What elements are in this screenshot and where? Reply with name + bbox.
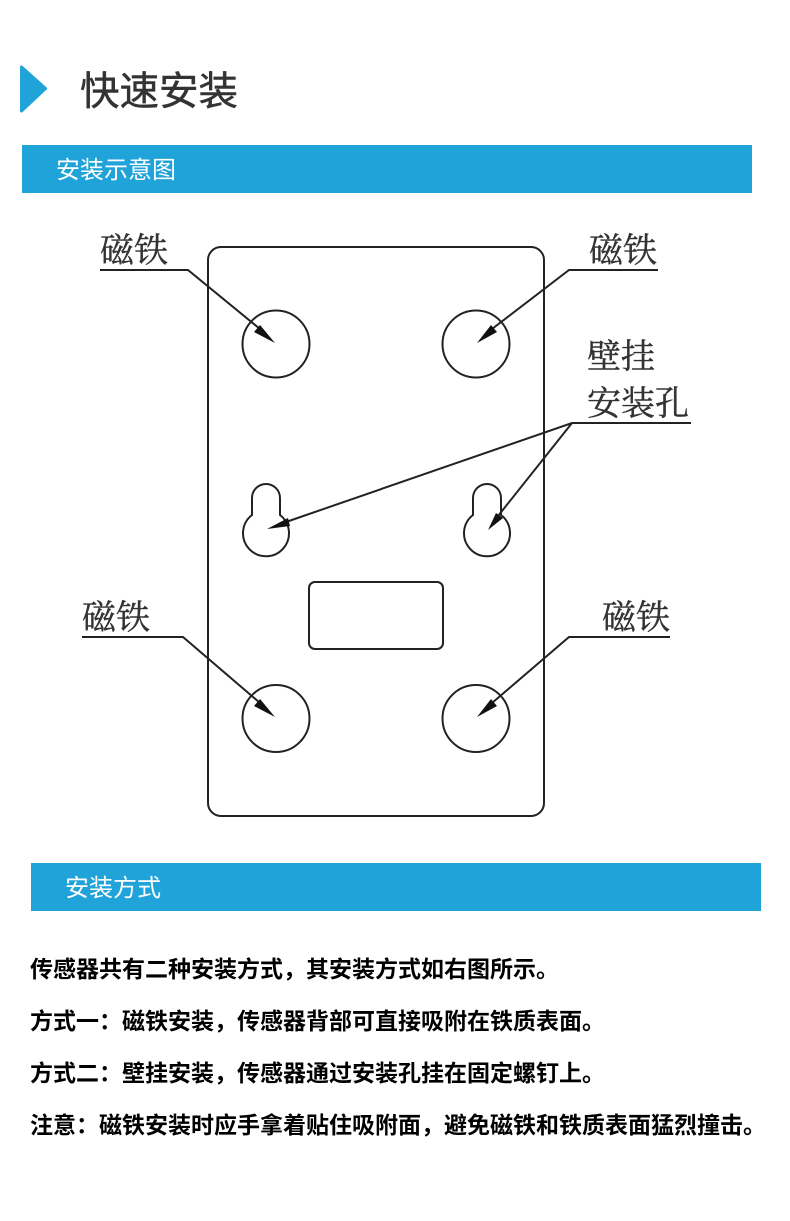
text: caution note: 注意：磁铁安装时应手拿着贴住吸附面，避免磁铁和铁质表面猛烈撞击。 [30, 1112, 766, 1138]
label: magnet top left [100, 232, 275, 343]
section band: installation methods: 安装方式 [65, 875, 161, 902]
text: method one: 方式一：磁铁安装，传感器背部可直接吸附在铁质表面。 [30, 1008, 605, 1034]
section band: installation diagram [22, 145, 752, 193]
label: magnet bottom left [82, 599, 275, 717]
label: magnet top left: 磁铁 [100, 232, 168, 270]
device back plate [208, 247, 544, 816]
label: wall-mount holes: 壁挂 [587, 338, 655, 376]
magnet circles [242, 310, 510, 752]
label: magnet top right: 磁铁 [589, 232, 657, 270]
text: method two: 方式二：壁挂安装，传感器通过安装孔挂在固定螺钉上。 [30, 1060, 605, 1086]
title: 快速安装 [80, 70, 238, 114]
text: intro: 传感器共有二种安装方式，其安装方式如右图所示。 [30, 956, 559, 982]
wall-mount keyholes [243, 484, 510, 556]
label: magnet bottom left: 磁铁 [82, 599, 150, 637]
section band: installation methods [31, 863, 761, 911]
section band: installation diagram: 安装示意图 [56, 157, 176, 184]
label: magnet bottom right: 磁铁 [602, 599, 670, 637]
label: magnet top right [477, 232, 658, 343]
label: magnet bottom right [477, 599, 670, 717]
display window [309, 582, 443, 649]
installation diagram [82, 232, 691, 817]
label: wall-mount holes: 安装孔 [587, 385, 689, 423]
icon: blue heading triangle [20, 66, 48, 113]
label: wall-mount holes [267, 338, 691, 530]
